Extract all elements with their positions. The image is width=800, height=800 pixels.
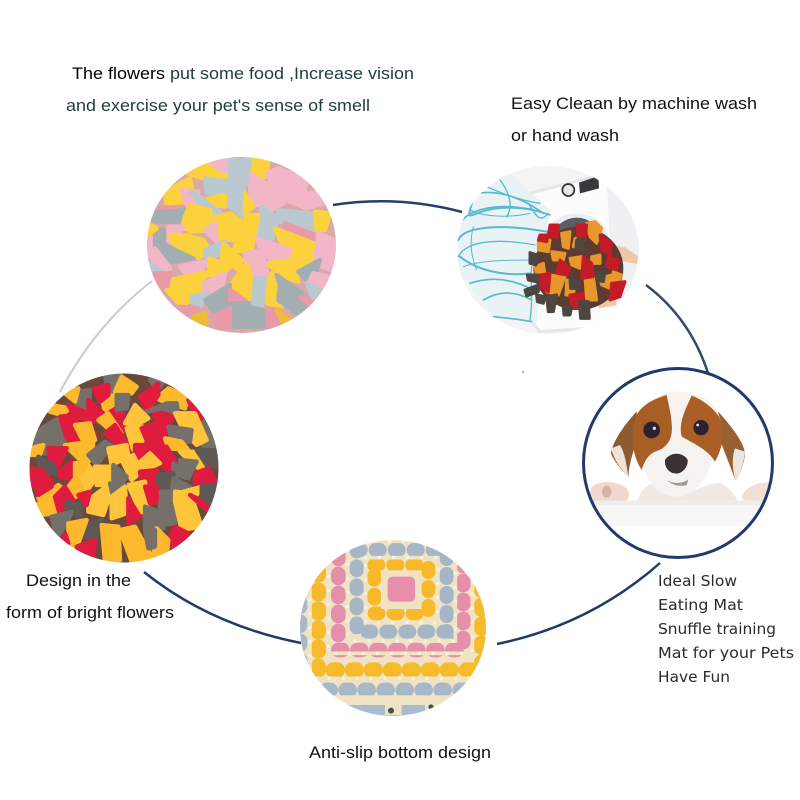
brown patches xyxy=(633,395,672,470)
washing machine body xyxy=(530,176,594,333)
text: design caption xyxy=(6,571,174,622)
text: ideal slow eating mat caption: Ideal Slow xyxy=(658,572,737,590)
heading: flowers caption xyxy=(66,64,414,115)
puppy body xyxy=(635,483,738,502)
photo: washing machine with water splash xyxy=(457,166,639,334)
puppy left ear xyxy=(611,412,638,477)
puppy eyes xyxy=(643,422,660,438)
connecting arc: bottom right xyxy=(497,563,660,644)
photo: bright red and yellow felt flower xyxy=(25,370,225,565)
puppy right ear xyxy=(718,412,745,481)
text: design caption: Design in the xyxy=(26,571,131,590)
heading: flowers caption: and exercise your pet's sense of smell xyxy=(66,96,370,115)
left paw xyxy=(590,482,629,504)
photo: puppy portrait xyxy=(590,392,769,506)
text: ideal slow eating mat caption: Have Fun xyxy=(658,668,730,686)
text: anti-slip caption: Anti-slip bottom design xyxy=(309,743,491,762)
text: ideal slow eating mat caption xyxy=(658,572,794,686)
text: easy clean caption: Easy Cleaan by machine wash xyxy=(511,94,757,113)
water splash xyxy=(457,170,550,323)
hands xyxy=(616,246,638,264)
right paw xyxy=(742,482,769,504)
photo: pastel felt flower xyxy=(147,157,336,333)
connecting arc: left xyxy=(60,281,152,392)
puppy head xyxy=(644,392,720,496)
photo: anti-slip mat underside xyxy=(300,540,486,716)
connecting arc: bottom left xyxy=(144,572,301,643)
connecting arc: top xyxy=(333,201,462,212)
text: easy clean caption: or hand wash xyxy=(511,126,619,145)
text: design caption: form of bright flowers xyxy=(6,603,174,622)
heading: flowers caption: The flowers put some food ,Increase vision xyxy=(72,64,414,83)
ring around puppy xyxy=(584,368,772,558)
table ledge xyxy=(595,500,760,507)
text: ideal slow eating mat caption: Snuffle training xyxy=(658,620,776,638)
connecting arc: right xyxy=(646,285,708,373)
puppy nose xyxy=(665,454,688,474)
orange speck xyxy=(522,371,524,373)
text: easy clean caption xyxy=(511,94,757,145)
mini snuffle flower xyxy=(533,227,623,310)
text: ideal slow eating mat caption: Mat for your Pets xyxy=(658,644,794,662)
text: ideal slow eating mat caption: Eating Mat xyxy=(658,596,743,614)
